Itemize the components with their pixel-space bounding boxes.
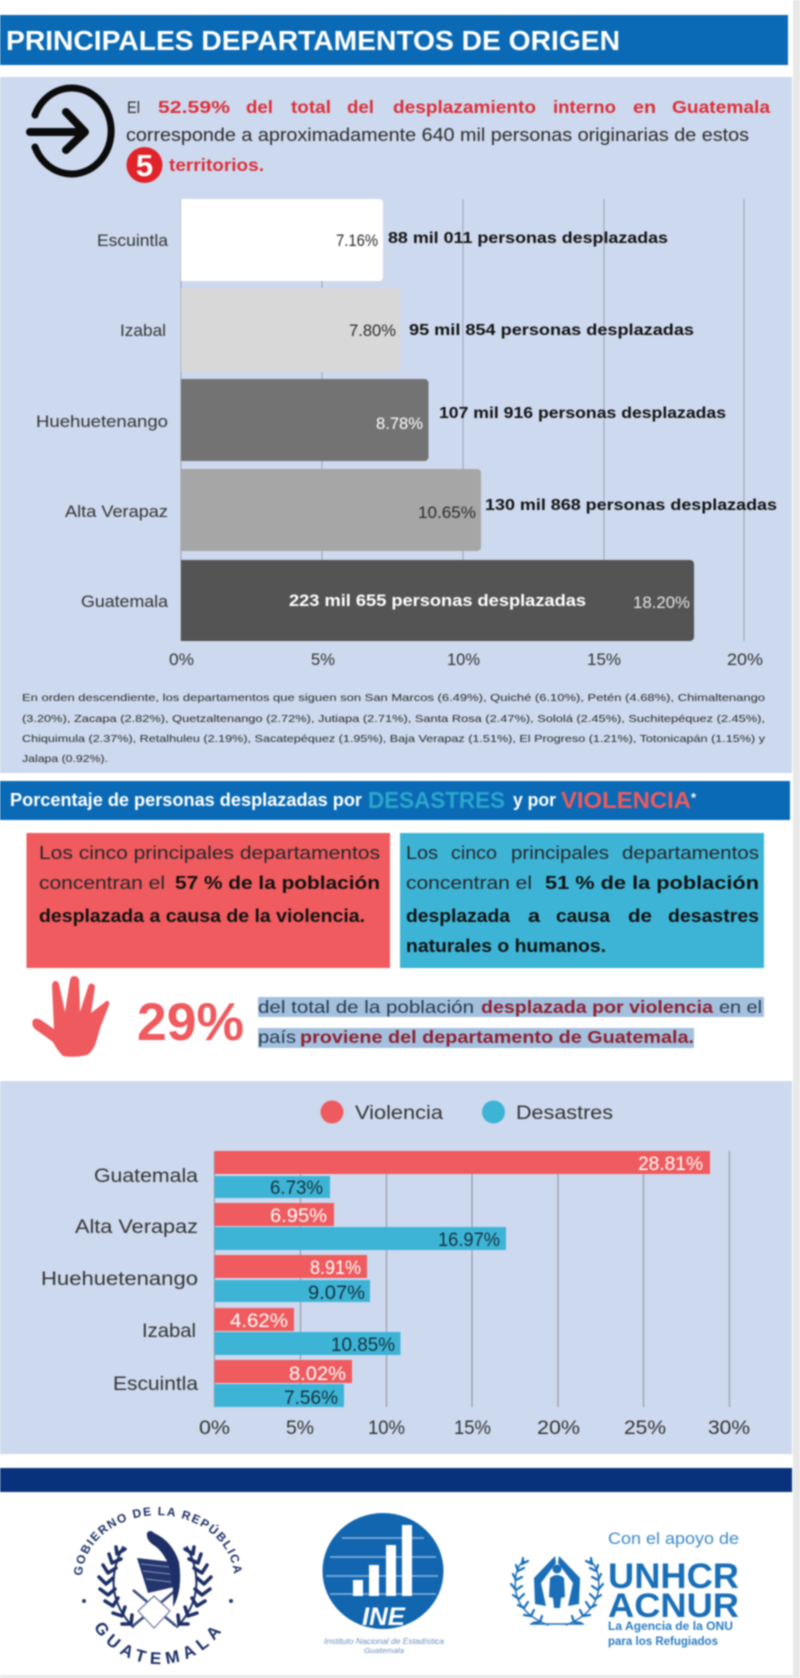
callout: disasters: de (628, 906, 652, 926)
icon: number 5 badge: 5 (136, 148, 153, 183)
bar: Alta Verapaz: 10.65% (418, 503, 476, 522)
highlighted text: violence share (258, 997, 764, 1048)
callout: disasters: cinco (451, 843, 497, 863)
panel: principal departments (0, 77, 792, 773)
footnote: other departments: En orden descendiente, los departamentos que siguen son San Marcos (6.49%), Quiché (6.10%), Petén (4.68%), Chimaltenango (22, 692, 765, 704)
logo: Gobierno de Guatemala: GOBIERNO DE LA REPÚBLICA (73, 1506, 242, 1576)
callout: disasters: Los (406, 843, 438, 863)
x axis labels: 15% (454, 1418, 491, 1439)
chart legend (320, 1100, 613, 1124)
group: Escuintla (113, 1360, 352, 1409)
intro text: corresponde a aproximadamente 640 mil personas originarias de estos (126, 124, 749, 145)
group: Alta Verapaz: Alta Verapaz (75, 1217, 198, 1238)
footnote: other departments: (3.20%), Zacapa (2.82%), Quetzaltenango (2.72%), Jutiapa (2.71%), Santa Rosa (2.47%), Sololá (2.45%), Suchitepéquez (2.45%), (22, 713, 765, 725)
bar: Guatemala: Guatemala (81, 592, 169, 611)
x axis labels: 10% (447, 650, 480, 669)
callout: disasters: 51 % de la población (545, 873, 759, 893)
highlighted text: violence share: desplazada por violencia (481, 997, 713, 1017)
highlighted text: violence share: país (258, 1027, 296, 1047)
icon: red hand (32, 976, 109, 1057)
group: Alta Verapaz: 6.95% (270, 1206, 327, 1227)
grouped bar chart (41, 1151, 750, 1439)
bar: Escuintla: 7.16% (336, 231, 378, 250)
group: Escuintla: 7.56% (284, 1388, 338, 1409)
section banner: disasters and violence: Porcentaje de personas desplazadas por (10, 789, 362, 810)
group: Izabal (142, 1308, 400, 1356)
group: Escuintla: Escuintla (113, 1374, 198, 1395)
group: Izabal: 4.62% (230, 1311, 288, 1332)
x axis labels (169, 650, 763, 669)
callout: violence: desplazada a causa de la violencia. (39, 906, 365, 926)
bar: Alta Verapaz: Alta Verapaz (65, 502, 168, 521)
bar: Escuintla: Escuintla (97, 231, 169, 250)
group: Huehuetenango: Huehuetenango (41, 1269, 198, 1290)
section banner: disasters and violence: y por (513, 789, 556, 810)
callout: disasters: concentran el (406, 873, 532, 893)
intro text: territorios. (169, 155, 264, 175)
section banner: disasters and violence: VIOLENCIA (561, 787, 691, 813)
logo: UNHCR ACNUR: para los Refugiados (608, 1634, 718, 1648)
x axis labels: 15% (587, 650, 621, 669)
group: Izabal: 10.85% (331, 1335, 395, 1356)
x axis labels: 5% (286, 1418, 314, 1439)
section banner: disasters and violence (0, 781, 790, 820)
intro text: El (127, 98, 140, 117)
intro text: del (246, 97, 273, 117)
callout: disasters: causa (556, 906, 611, 926)
group: Alta Verapaz (75, 1203, 506, 1251)
icon: arrow entering circle (30, 88, 111, 174)
bar: Huehuetenango: Huehuetenango (36, 412, 168, 431)
panel: violence vs disasters chart (0, 1081, 792, 1454)
x axis labels: 20% (727, 650, 763, 669)
bar: Izabal: Izabal (120, 321, 166, 340)
x axis labels: 10% (368, 1418, 405, 1439)
x axis labels: 0% (199, 1418, 230, 1439)
bar: Alta Verapaz: 130 mil 868 personas desplazadas (485, 497, 777, 514)
logo: INE: Guatemala (364, 1646, 404, 1655)
logo: UNHCR ACNUR: UNHCR (608, 1557, 739, 1596)
bar: Alta Verapaz (65, 469, 777, 551)
group: Escuintla: 8.02% (289, 1364, 346, 1385)
group: Guatemala: 6.73% (270, 1178, 323, 1199)
title banner: PRINCIPALES DEPARTAMENTOS DE ORIGEN (6, 25, 620, 56)
icon: number 5 badge (126, 147, 162, 183)
callout: disasters: departamentos (622, 843, 759, 863)
scroll and crossed arms (137, 1558, 174, 1593)
bar: Izabal (120, 288, 694, 372)
bar: Izabal: 95 mil 854 personas desplazadas (409, 322, 694, 339)
logo: UNHCR ACNUR: La Agencia de la ONU (608, 1619, 733, 1633)
x axis labels: 5% (311, 650, 335, 669)
callout: violence: Los cinco principales departamentos (39, 843, 380, 863)
emblem: wreath right (566, 1558, 603, 1625)
intro text: Guatemala (672, 97, 770, 117)
logo: Gobierno de Guatemala: GUATEMALA (94, 1622, 222, 1666)
bar: Huehuetenango: 8.78% (376, 414, 423, 433)
bar: Huehuetenango (36, 379, 726, 461)
footnote: other departments (22, 692, 766, 765)
intro text: desplazamiento (393, 97, 536, 117)
bar: Guatemala (81, 560, 694, 641)
footer band (0, 1468, 792, 1492)
logo: INE (322, 1513, 445, 1655)
callout: disasters: naturales o humanos. (406, 936, 606, 956)
intro text: total (291, 97, 331, 117)
highlighted text: violence share: proviene del departamento de Guatemala. (300, 1027, 694, 1047)
chart legend: Violencia (355, 1103, 443, 1124)
callout: disasters: a (528, 906, 541, 926)
group: Guatemala: Guatemala (94, 1166, 198, 1187)
x axis labels: 20% (537, 1418, 580, 1439)
section banner: disasters and violence: DESASTRES (368, 787, 505, 813)
group: Huehuetenango: 8.91% (310, 1258, 361, 1279)
intro text: interno (553, 97, 616, 117)
section banner: disasters and violence: * (691, 790, 697, 805)
chart legend: Desastres (516, 1103, 613, 1124)
logo: UNHCR ACNUR: ACNUR (608, 1587, 739, 1625)
callout: disasters: principales (511, 843, 609, 863)
bar: Huehuetenango: 107 mil 916 personas desplazadas (439, 405, 726, 422)
wreath: left branch (99, 1547, 133, 1627)
highlighted text: violence share: en el (719, 997, 762, 1017)
x axis labels (199, 1418, 750, 1439)
logo: INE: Instituto Nacional de Estadística (324, 1637, 445, 1646)
logo: INE: INE (362, 1603, 406, 1631)
x axis labels: 25% (624, 1418, 666, 1439)
title banner (0, 15, 788, 65)
quetzal (147, 1531, 180, 1607)
bar: Izabal: 7.80% (349, 321, 396, 340)
logo: UNHCR ACNUR (511, 1529, 739, 1648)
group: Izabal: Izabal (142, 1321, 196, 1342)
statistic: 29%: 29% (137, 993, 244, 1052)
callout: violence: 57 % de la población (175, 873, 380, 893)
intro text: en (633, 97, 656, 117)
bar: Guatemala: 223 mil 655 personas desplazadas (289, 591, 586, 610)
callout: violence (26, 833, 390, 968)
logo: Gobierno de Guatemala (73, 1506, 242, 1666)
intro text: del (347, 97, 374, 117)
callout: disasters (400, 833, 764, 968)
callout: disasters: desplazada (406, 906, 511, 926)
x axis labels: 30% (708, 1418, 750, 1439)
bar: Escuintla (97, 199, 668, 281)
bar chart: top five departments (36, 199, 777, 669)
intro text (126, 97, 770, 175)
group: Huehuetenango (41, 1255, 370, 1304)
bar: Escuintla: 88 mil 011 personas desplazadas (388, 230, 668, 247)
x axis labels: 0% (169, 650, 194, 669)
callout: violence: concentran el (39, 873, 165, 893)
group: Huehuetenango: 9.07% (308, 1283, 365, 1304)
group: Guatemala (94, 1151, 710, 1199)
emblem: sheltering hands and person (534, 1556, 580, 1608)
callout: disasters: desastres (668, 906, 759, 926)
intro text: 52.59% (158, 97, 231, 117)
logo: UNHCR ACNUR: Con el apoyo de (608, 1529, 739, 1548)
footnote: other departments: Chiquimula (2.37%), Retalhuleu (2.19%), Sacatepéquez (1.95%), Baja Verapaz (1.51%), El Progreso (1.21%), Totonicapán (1.15%) y (22, 733, 766, 745)
emblem: wreath left (511, 1558, 548, 1625)
footnote: other departments: Jalapa (0.92%). (22, 753, 108, 765)
group: Alta Verapaz: 16.97% (438, 1230, 500, 1251)
bar: Guatemala: 18.20% (633, 593, 690, 612)
group: Guatemala: 28.81% (638, 1154, 703, 1175)
wreath: right branch (177, 1547, 211, 1627)
highlighted text: violence share: del total de la población (258, 997, 474, 1017)
